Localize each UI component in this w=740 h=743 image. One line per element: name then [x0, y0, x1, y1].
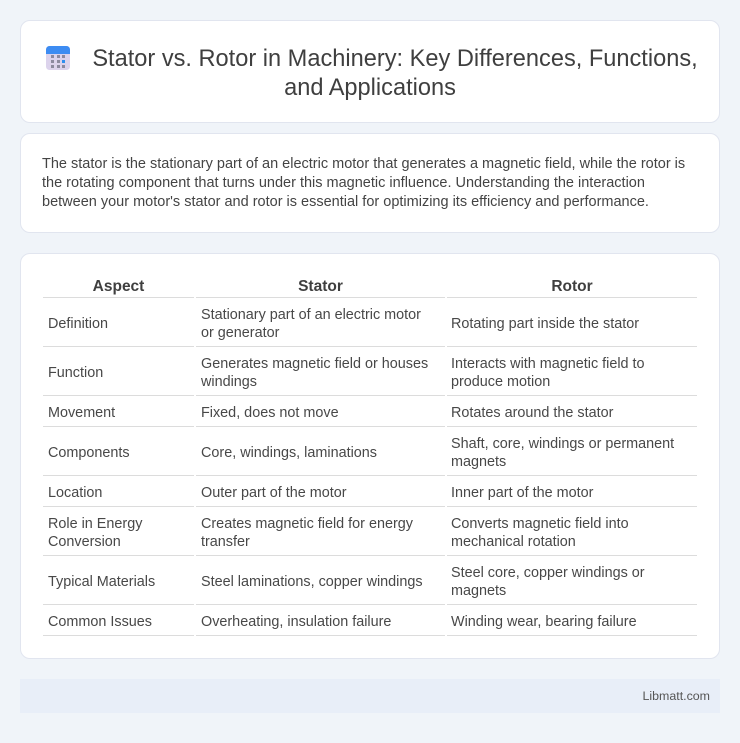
panel: introduction: [20, 133, 720, 233]
row: Movement: [48, 405, 614, 421]
row: Function: produce motion: [451, 374, 550, 390]
row: Common Issues: Common Issues: [48, 614, 152, 630]
table header: Rotor: Rotor: [551, 278, 593, 295]
row: Function: Generates magnetic field or houses: [201, 356, 428, 372]
text block: introduction: the rotating component that turns under this magnetic influence. Understanding the interaction: [42, 175, 645, 191]
row: Typical Materials: [48, 565, 645, 599]
row: Function: [48, 356, 645, 390]
row: Function: Function: [48, 365, 103, 381]
row: Movement: Fixed, does not move: [201, 405, 339, 421]
row: Role in Energy Conversion: Role in Energy: [48, 516, 142, 532]
row: Movement: Rotates around the stator: [451, 405, 613, 421]
row: Location: Location: [48, 485, 102, 501]
row: Typical Materials: magnets: [451, 583, 506, 599]
row: Common Issues: Winding wear, bearing failure: [451, 614, 637, 630]
title: [92, 46, 698, 101]
row: Typical Materials: Typical Materials: [48, 574, 155, 590]
text block: introduction: between your motor's stator and rotor is essential for optimizing its efficiency and performance.: [42, 194, 649, 210]
title: and Applications: [284, 75, 456, 101]
row: Definition: Definition: [48, 316, 108, 332]
row: Role in Energy Conversion: mechanical rotation: [451, 534, 576, 550]
row: Components: Core, windings, laminations: [201, 445, 377, 461]
row: Role in Energy Conversion: Converts magnetic field into: [451, 516, 629, 532]
row: Typical Materials: Steel laminations, copper windings: [201, 574, 423, 590]
footer bar: [20, 679, 720, 713]
row: Components: Components: [48, 445, 130, 461]
footer text: Libmatt.com: [643, 689, 710, 703]
row: Common Issues: [48, 614, 637, 630]
row: Typical Materials: Steel core, copper windings or: [451, 565, 645, 581]
row: Components: [48, 436, 674, 470]
row: Role in Energy Conversion: Conversion: [48, 534, 121, 550]
row: Components: magnets: [451, 454, 506, 470]
row: Location: [48, 485, 594, 501]
row: Definition: Rotating part inside the stator: [451, 316, 639, 332]
row: Common Issues: Overheating, insulation failure: [201, 614, 391, 630]
table header: Stator: Stator: [298, 278, 343, 295]
row: Definition: Stationary part of an electric motor: [201, 307, 421, 323]
row: Location: Inner part of the motor: [451, 485, 593, 501]
icon: calendar grid: [46, 46, 70, 70]
row: Function: Interacts with magnetic field to: [451, 356, 645, 372]
text block: introduction: [42, 156, 685, 210]
panel: title card: [20, 20, 720, 123]
comparison table: [43, 278, 697, 636]
table header: Aspect: Aspect: [93, 278, 144, 295]
row: Components: Shaft, core, windings or permanent: [451, 436, 674, 452]
row: Definition: [48, 307, 639, 341]
text block: introduction: The stator is the stationary part of an electric motor that generates a magnetic field, while the rotor is: [42, 156, 685, 172]
row: Definition: or generator: [201, 325, 279, 341]
row: Role in Energy Conversion: [48, 516, 629, 550]
row: Role in Energy Conversion: Creates magnetic field for energy: [201, 516, 413, 532]
row: Function: windings: [201, 374, 257, 390]
title: Stator vs. Rotor in Machinery: Key Differences, Functions,: [92, 46, 698, 72]
row: Role in Energy Conversion: transfer: [201, 534, 250, 550]
row: Movement: Movement: [48, 405, 115, 421]
row: Location: Outer part of the motor: [201, 485, 347, 501]
panel: comparison table card: [20, 253, 720, 659]
